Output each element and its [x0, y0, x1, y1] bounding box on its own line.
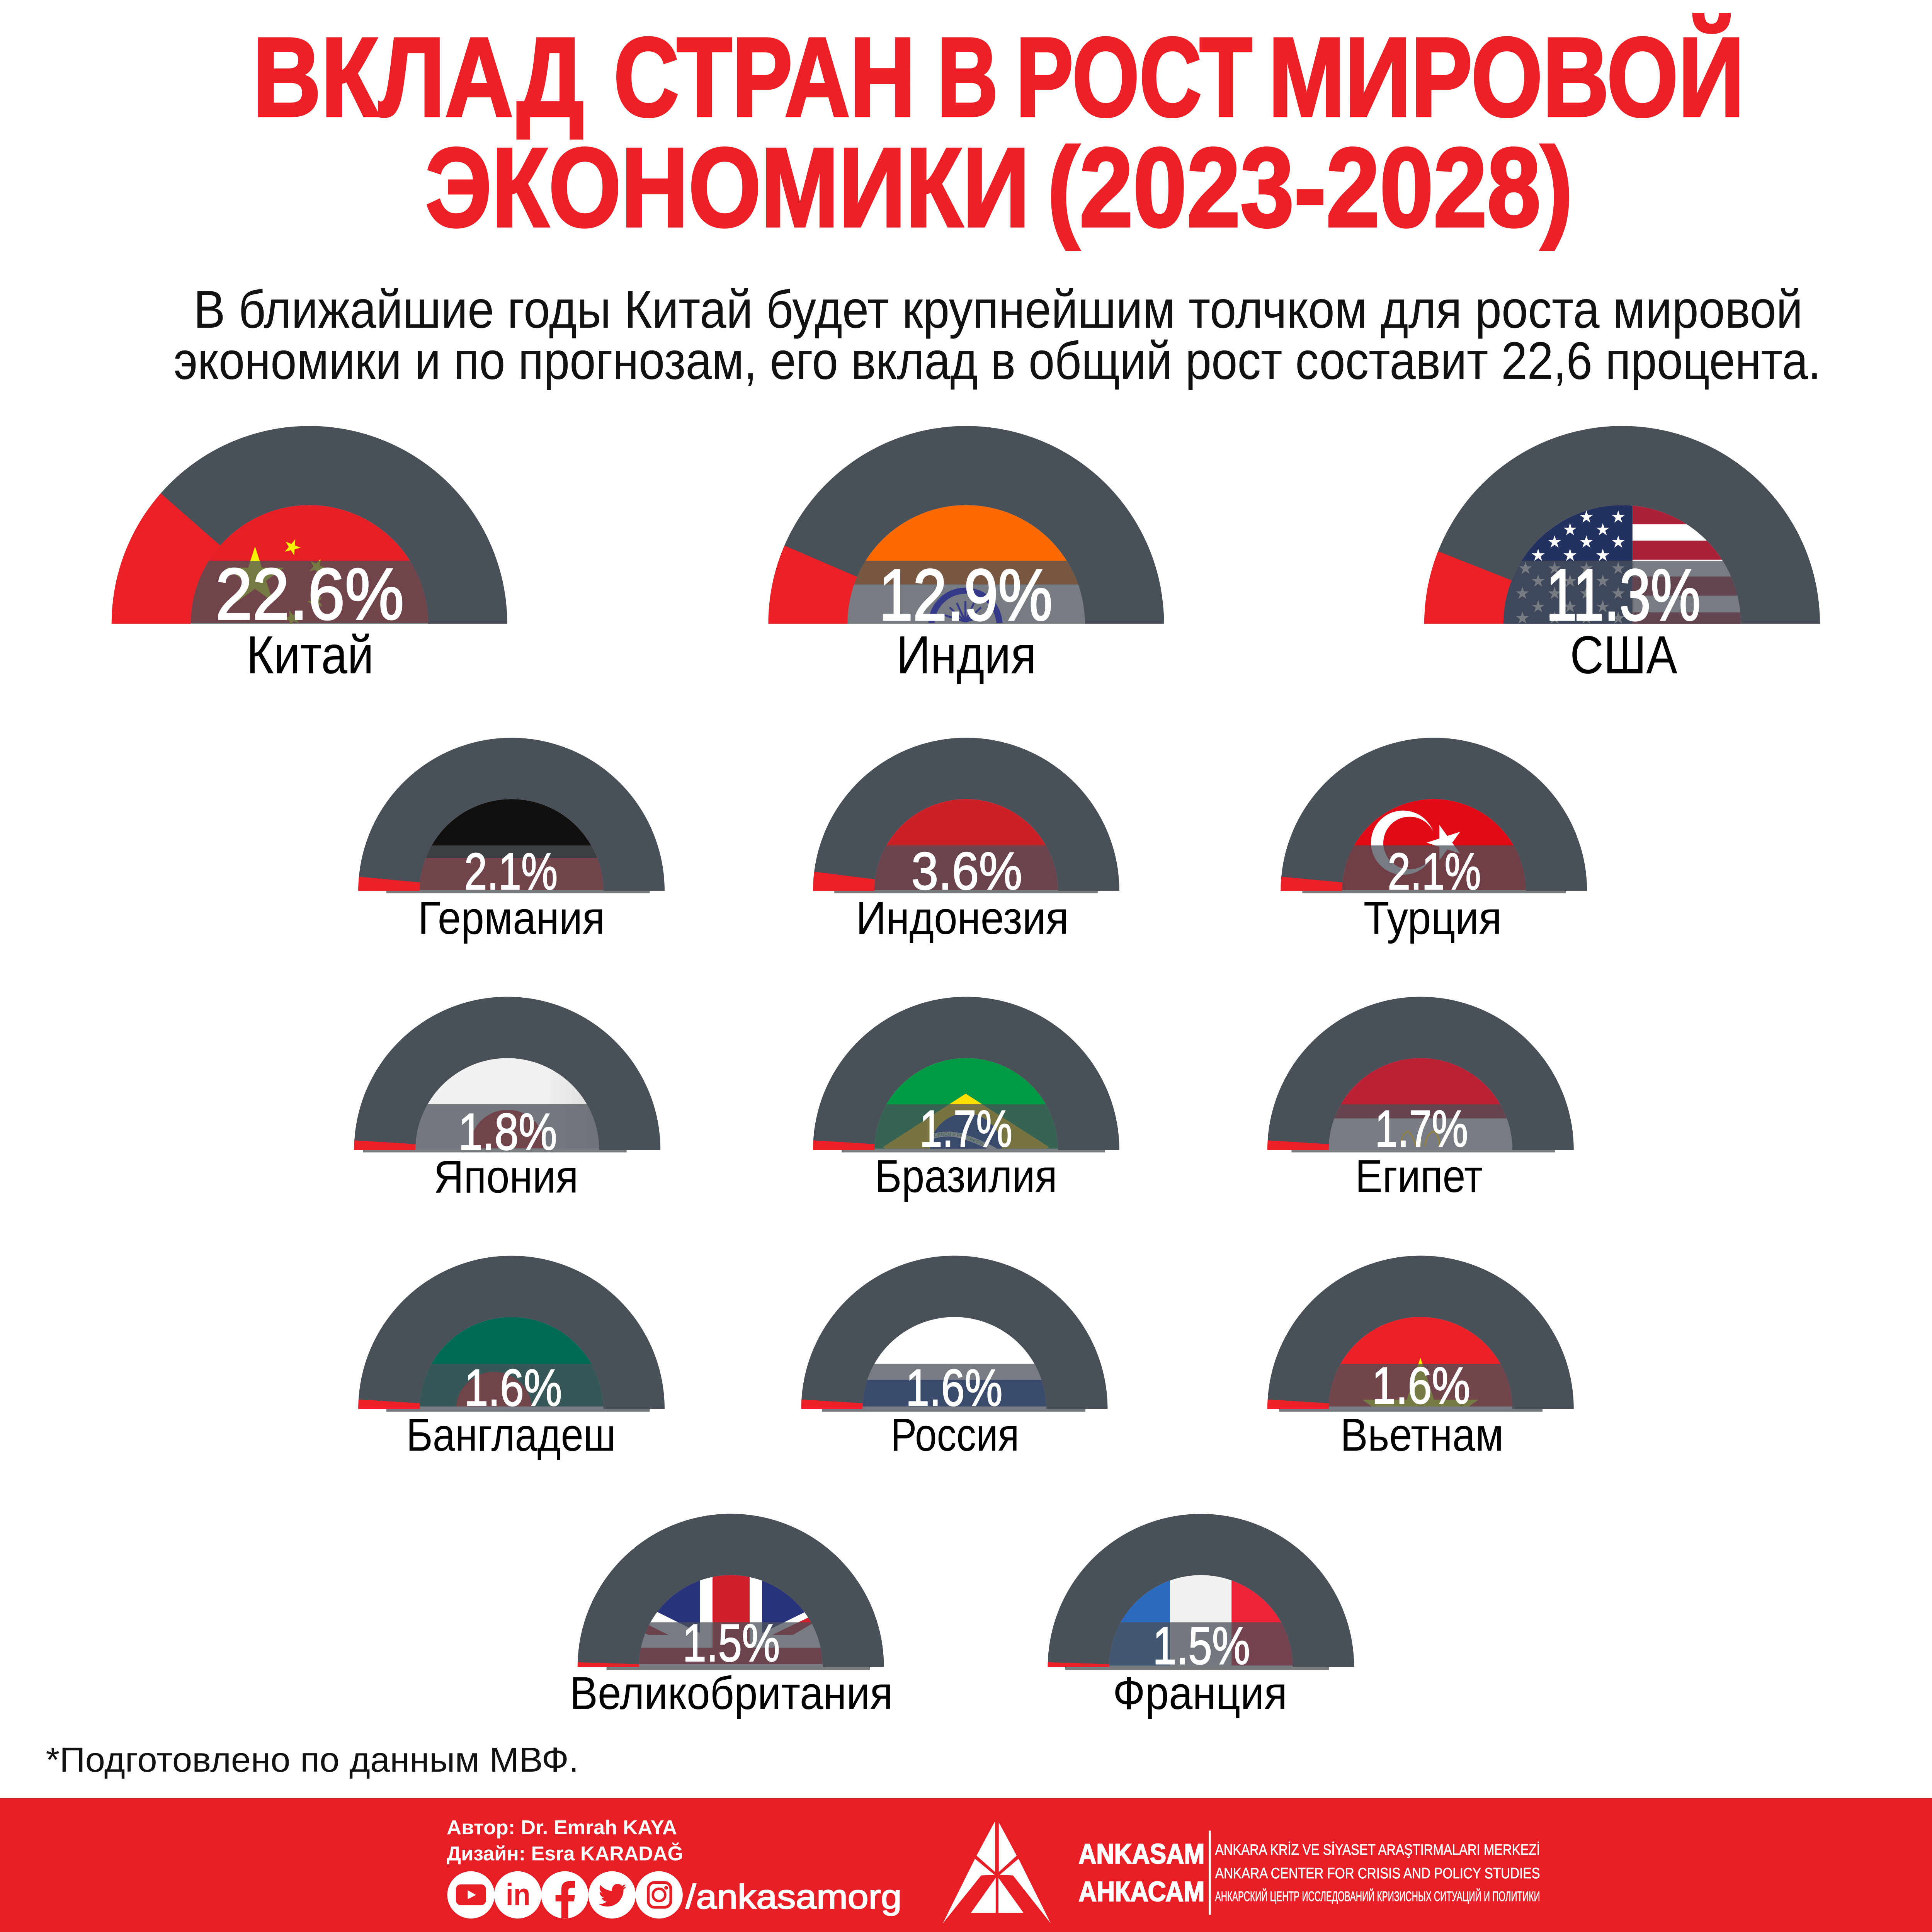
value: 12.9% [879, 554, 1053, 636]
flag: Indonesia [874, 799, 1058, 891]
title: ВКЛАД [253, 14, 584, 140]
gauge: USA [1424, 426, 1820, 685]
base strip [363, 1150, 627, 1152]
icon: ANKASAM logo [943, 1822, 1051, 1923]
flag: Egypt [1328, 1058, 1513, 1150]
flag: Russia [862, 1364, 1047, 1409]
country name: Великобритания [570, 1667, 893, 1719]
base strip [386, 1409, 650, 1412]
gauge ring [1048, 1514, 1354, 1667]
gauge: Indonesia [813, 738, 1119, 944]
title: (2023-2028) [1047, 124, 1573, 251]
base strip [607, 1667, 870, 1670]
red share segment [112, 493, 220, 624]
country name: Япония [434, 1151, 578, 1202]
flag: France [1109, 1575, 1293, 1667]
organisation names: ANKARA KRİZ VE SİYASET ARAŞTIRMALARI MERKEZİ [1215, 1842, 1540, 1858]
base strip [822, 1409, 1085, 1412]
base strip [834, 891, 1098, 893]
gauge: Germany [358, 738, 665, 944]
gauge: Brazil [813, 997, 1119, 1202]
flag: Brazil [874, 1058, 1058, 1185]
value: 1.5% [1153, 1616, 1250, 1675]
country name: Китай [247, 625, 374, 685]
gauge: Bangladesh [358, 1256, 665, 1461]
gauge: Russia [801, 1256, 1107, 1461]
value: 3.6% [911, 842, 1022, 901]
base strip [1302, 891, 1566, 893]
country name: Индия [896, 625, 1036, 685]
flag: Bangladesh [420, 1317, 604, 1448]
red share segment [1048, 1662, 1109, 1667]
organisation names [1215, 1842, 1540, 1904]
icon: linkedin [494, 1871, 541, 1918]
gauge ring [1267, 997, 1574, 1150]
icon: instagram [635, 1871, 683, 1918]
subtitle text [174, 280, 1821, 391]
gauge ring [813, 997, 1119, 1150]
base strip [1065, 1667, 1329, 1670]
red share segment [1267, 1400, 1329, 1409]
gauge ring [1424, 426, 1820, 624]
value: 1.6% [464, 1359, 562, 1417]
flag: Turkey [1342, 799, 1526, 891]
gauge: Japan [354, 997, 660, 1202]
red share segment [578, 1662, 639, 1667]
country name: Египет [1355, 1150, 1483, 1202]
country name: США [1570, 625, 1677, 685]
gauge ring [358, 1256, 665, 1409]
gauge ring [358, 738, 665, 891]
base strip [386, 891, 650, 893]
gauge ring [768, 426, 1164, 624]
flag: Germany [420, 799, 604, 891]
logo divider [1209, 1831, 1211, 1915]
flag: Vietnam [1328, 1317, 1513, 1468]
title: СТРАН [614, 14, 915, 140]
flag: Brazil: ORDEM E PROGRESSO [934, 1131, 986, 1148]
gauge: Egypt [1267, 997, 1574, 1202]
icon: youtube [447, 1871, 495, 1918]
gauge ring [354, 997, 660, 1150]
source footnote: *Подготовлено по данным МВФ. [46, 1740, 579, 1779]
value: 2.1% [1388, 843, 1481, 901]
gauge: Vietnam [1267, 1256, 1574, 1468]
country name: Германия [418, 892, 605, 944]
red share segment [1424, 551, 1512, 624]
gauge: China [112, 426, 507, 685]
title: В [937, 14, 998, 140]
value: 1.8% [458, 1103, 557, 1161]
organisation names: АНКАРСКИЙ ЦЕНТР ИССЛЕДОВАНИЙ КРИЗИСНЫХ СИТУАЦИЙ И ПОЛИТИКИ [1215, 1888, 1540, 1904]
base strip [1279, 1409, 1543, 1412]
value: 11.3% [1546, 554, 1701, 636]
value: 1.7% [920, 1100, 1012, 1158]
value: 22.6% [216, 553, 404, 635]
country name: Франция [1113, 1667, 1287, 1719]
flag: Japan [415, 1058, 599, 1185]
credits: Дизайн: Esra KARADAĞ [447, 1842, 683, 1865]
gauge ring [1267, 1256, 1574, 1409]
value: 1.5% [682, 1613, 780, 1673]
red share segment [813, 1140, 874, 1150]
value: 2.1% [464, 843, 558, 901]
red share segment [354, 1140, 416, 1150]
icon: linkedin: in [506, 1877, 531, 1912]
value: 1.6% [906, 1359, 1002, 1417]
gauge: Turkey [1281, 738, 1587, 944]
red share segment [358, 1400, 420, 1409]
logo wordmarks [1078, 1838, 1205, 1907]
title: МИРОВОЙ [1268, 14, 1744, 140]
social handle: /ankasamorg [685, 1878, 902, 1916]
red share segment [768, 546, 857, 624]
country name: Вьетнам [1340, 1409, 1503, 1461]
red share segment [1281, 877, 1342, 891]
gauge ring [1281, 738, 1587, 891]
flag: India [847, 505, 1085, 659]
gauge ring [801, 1256, 1107, 1409]
title [253, 14, 1744, 251]
country name: Россия [891, 1409, 1019, 1461]
gauge ring [578, 1514, 884, 1667]
gauge: United Kingdom [570, 1514, 893, 1719]
credits [447, 1816, 683, 1865]
value: 1.7% [1375, 1100, 1468, 1158]
title: ЭКОНОМИКИ [425, 124, 1030, 250]
country name: Бразилия [875, 1150, 1057, 1202]
base strip [1291, 1150, 1555, 1152]
red share segment [801, 1400, 863, 1409]
logo wordmarks: ANKASAM [1078, 1838, 1205, 1869]
icon: twitter [588, 1871, 636, 1918]
country name: Индонезия [856, 892, 1069, 944]
title: РОСТ [1016, 14, 1252, 140]
gauge ring [813, 738, 1119, 891]
flag: China [191, 505, 428, 628]
gauge ring [112, 426, 507, 624]
gauge: India [768, 426, 1164, 685]
value: 1.6% [1372, 1357, 1470, 1415]
country name: Бангладеш [406, 1409, 616, 1461]
base strip [842, 1150, 1105, 1152]
gauge: France [1048, 1514, 1354, 1719]
flag: United Kingdom [634, 1573, 828, 1667]
flag: USA [1502, 505, 1759, 624]
country name: Турция [1364, 892, 1502, 944]
red share segment [358, 877, 420, 891]
logo wordmarks: АНКАСАМ [1078, 1876, 1205, 1907]
icon: facebook [541, 1871, 588, 1918]
organisation names: ANKARA CENTER FOR CRISIS AND POLICY STUDIES [1215, 1865, 1540, 1882]
red share segment [813, 872, 875, 891]
red share segment [1267, 1140, 1329, 1150]
footer band [0, 1798, 1932, 1932]
credits: Автор: Dr. Emrah KAYA [447, 1816, 677, 1839]
